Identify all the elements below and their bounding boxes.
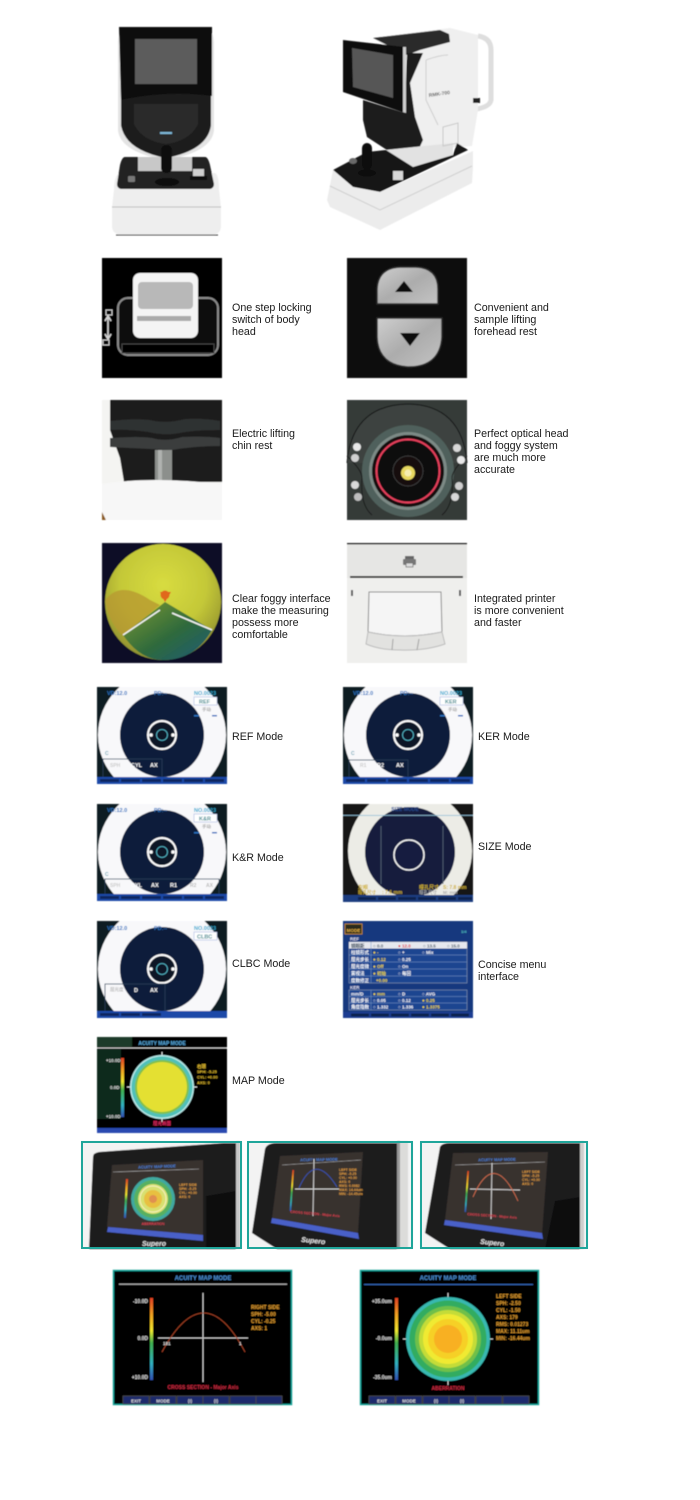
caption: forehead rest: sample lifting [474,314,536,326]
screen: menu interface: ● Off [373,964,384,969]
screen: aberration chart: AXS: 179 [496,1315,518,1321]
screen: cross section chart: MODE [156,1398,170,1404]
framed photo: major axis red curve on device: Supero [480,1239,505,1248]
framed photo: major axis red curve on device: ACUITY MAP MODE [478,1157,516,1162]
caption: menu interface: Concise menu [478,959,546,971]
framed photo: major axis red curve on device: CYL: +0.00 [522,1178,540,1182]
screen: menu interface: 雾视法 [351,970,365,977]
screen: CLBC mode: NO.0023 [194,926,216,932]
caption: chin rest: Electric lifting [232,428,295,440]
screen: K&R mode: SPH [110,883,121,889]
screen: REF mode: 手动 [202,706,211,713]
screen: aberration chart: (I) [434,1398,439,1404]
framed photo: major axis red curve on device: SPH: -5.25 [522,1174,539,1178]
screen: KER mode: VD:12.0 [353,691,373,697]
frame border: blue curve photo [248,1142,412,1248]
caption: MAP mode: MAP Mode [232,1075,285,1087]
screen: REF mode: CYL [131,763,143,769]
screen: MAP mode: 右眼 [197,1063,206,1070]
screen: REF mode: REF [199,700,211,706]
screen: menu interface: MODE [347,928,360,933]
screen: cross section chart: 181 [163,1341,171,1346]
screen: MAP mode: CYL: +0.00 [197,1074,218,1080]
screen: SIZE mode: : 7.6 mm [382,890,403,896]
framed photo: major axis blue curve on device: SPH: -5.25 [339,1172,356,1176]
caption: locking switch: One step locking [232,302,312,314]
screen: aberration chart: LEFT SIDE [496,1294,522,1300]
framed photo: aberration map on device: CYL: +0.00 [179,1191,197,1195]
screen: SIZE mode: 瞳孔尺寸 [419,884,439,891]
screen: menu interface: ○ Mix [422,950,434,955]
screen: KER mode: NO.0023 [440,691,462,697]
screen: cross section chart: +10.0D [132,1375,148,1381]
screen: menu interface: ● 初始 [373,970,386,977]
photo: forehead rest buttons [347,258,467,378]
screen: KER mode: 手动 [448,706,457,713]
screen: aberration chart: -0.0um [376,1336,393,1342]
screen: REF mode: C [105,751,109,757]
screen: KER mode: PD:-- [400,691,413,697]
screen: KER mode: C [351,751,355,757]
screen: MAP mode: AXS: 0 [197,1080,211,1085]
screen: cross section chart: (I) [214,1398,219,1404]
screen: menu interface: ○ 每回 [398,970,411,977]
screen: menu interface: ○ 1.336 [398,1004,414,1010]
frame border: aberration photo [82,1142,241,1248]
screen: CLBC mode [97,905,227,1033]
screen: menu interface: ○ 0.05 [373,998,386,1003]
caption: foggy interface: comfortable [232,629,288,641]
screen: menu interface: ● 0.12 [373,957,386,962]
screen: menu interface: ○ 0.12 [398,998,411,1003]
screen: menu interface: 屈光步长 [351,997,369,1004]
screen: SIZE mode: S: 7.8 mm [443,885,467,891]
caption: REF mode: REF Mode [232,731,283,743]
caption: locking switch: switch of body [232,314,300,326]
caption: printer: Integrated printer [474,593,556,605]
product photo: front view of the device [112,27,221,235]
framed photo: major axis blue curve on device: Supero [301,1237,326,1246]
caption: optical head: accurate [474,464,515,476]
screen: REF mode: SPH [110,763,121,769]
framed photo: major axis blue curve on device: CYL: +0.00 [339,1176,357,1180]
screen: menu interface: 1/4 [461,929,467,934]
screen: menu interface: ○ D [398,992,406,996]
caption: SIZE mode: SIZE Mode [478,841,532,853]
screen: menu interface: KER [350,985,360,990]
framed photo: major axis red curve on device: AXS: 0 [522,1182,533,1186]
screen: MAP mode: 0.0D [110,1085,120,1090]
caption: KER mode: KER Mode [478,731,530,743]
photo: locking switch [102,258,222,378]
screen: REF mode: NO.0023 [194,691,216,697]
screen: aberration chart: MIN: -16.44um [496,1336,530,1342]
screen: menu interface: 角度指数 [351,1004,369,1010]
screen: aberration chart [360,1270,538,1404]
framed photo: aberration map on device: SPH: -5.25 [179,1187,196,1191]
screen: SIZE mode: 瞳孔尺寸 [419,889,437,896]
framed photo: aberration map on device [81,1141,242,1249]
framed photo: aberration map on device: Supero [142,1241,167,1248]
screen: menu interface: REF [350,936,359,942]
screen: CLBC mode: 屈光度 [110,986,124,993]
photo: integrated printer [347,543,467,663]
caption: optical head: Perfect optical head [474,428,569,440]
caption: printer: and faster [474,617,522,629]
caption: optical head: are much more [474,452,546,464]
screen: MAP mode: +10.0D [106,1114,121,1119]
screen: MAP mode: SPH: -5.25 [197,1069,218,1074]
screen: CLBC mode: VD:12.0 [107,926,127,932]
caption: forehead rest: forehead rest [474,326,537,338]
screen: menu interface [343,921,473,1018]
screen: CLBC mode: D [134,988,138,994]
screen: aberration chart: RMS: 0.01273 [496,1322,528,1328]
screen: menu interface: 镜眼距 [351,942,365,950]
caption: printer: is more convenient [474,605,564,617]
screen: cross section chart: 1 [239,1341,242,1346]
screen: MAP mode: 屈光断面 [153,1120,171,1127]
screen: aberration chart: CYL: -1.50 [496,1308,521,1314]
photo: foggy interface [102,543,222,663]
screen: K&R mode: 手动 [202,823,211,830]
screen: K&R mode: PD:-- [154,808,167,814]
screen: REF mode [97,671,227,799]
photo: optical head [347,400,467,520]
screen: menu interface: ● 12.0 [398,944,411,948]
screen: aberration chart: MODE [402,1398,416,1404]
screen: CLBC mode: AX [150,988,158,994]
screen: cross section chart [114,1270,292,1404]
framed photo: aberration map on device: AXS: 0 [179,1195,190,1199]
frame border: red curve photo [421,1142,587,1248]
screen: menu interface: ○ On [398,964,408,969]
screen: K&R mode: K&R [199,816,211,822]
framed photo: major axis blue curve on device: MAX: 14.44um [339,1188,363,1192]
screen: MAP mode [97,1037,227,1133]
screen: SIZE mode: 左眼 [358,884,368,891]
screen: aberration chart: -35.0um [373,1375,393,1381]
screen: cross section chart: SPH: -5.00 [251,1312,276,1318]
screen: menu interface: ○ 0.0 [373,944,384,948]
caption: foggy interface: make the measuring [232,605,329,617]
screen: menu interface: ○ 1.332 [373,1004,389,1010]
framed photo: aberration map on device: ACUITY MAP MODE [138,1163,176,1170]
framed photo: major axis blue curve on device: CROSS SECTION - Major Axis [290,1210,340,1218]
screen: cross section chart: CROSS SECTION - Major Axis [168,1385,239,1391]
screen: SIZE mode [343,789,473,913]
screen: menu interface: ● mm [373,992,385,996]
framed photo: major axis red curve on device: LEFT SIDE [522,1170,541,1174]
screen: KER mode: R1 [360,763,367,769]
framed photo: major axis red curve on device [420,1141,588,1249]
screen: menu interface: ● 1.3375 [422,1004,440,1010]
screen: aberration chart: ACUITY MAP MODE [420,1276,476,1282]
screen: menu interface: 屈光步长 [351,956,369,963]
screen: cross section chart: AXS: 1 [251,1326,267,1332]
screen: K&R mode: NO.0023 [194,808,216,814]
screen: menu interface: +0.00 [376,978,388,983]
screen: aberration chart: (I) [460,1398,465,1404]
screen: SIZE mode: 瞳孔尺寸 [358,889,376,896]
caption: optical head: and foggy system [474,440,558,452]
framed photo: major axis blue curve on device: LEFT SIDE [339,1168,358,1172]
screen: KER mode: KER [445,700,457,706]
screen: aberration chart: SPH: -2.50 [496,1301,521,1307]
screen: aberration chart: +35.0um [372,1299,393,1305]
product photo: angled view of the device [327,28,491,230]
photo: chin rest [102,400,222,520]
screen: menu interface: ○ 13.5 [423,944,436,948]
screen: menu interface: 柱镜形式 [351,949,369,956]
caption: K&R mode: K&R Mode [232,852,284,864]
screen: CLBC mode: CLBC [197,934,212,940]
screen: cross section chart: ACUITY MAP MODE [175,1276,231,1282]
screen: aberration chart: MAX: 11.11um [496,1329,530,1335]
screen: menu interface: ● - [373,950,379,955]
caption: chin rest: chin rest [232,440,272,452]
screen: menu interface: ○ 0.25 [398,957,411,962]
screen: menu interface: ○ 15.0 [447,944,460,948]
screen: K&R mode [97,788,227,916]
framed photo: major axis blue curve on device: ACUITY MAP MODE [300,1157,338,1162]
screen: K&R mode: R1 [170,883,177,889]
framed photo: major axis red curve on device: CROSS SECTION - Major Axis [467,1212,517,1220]
caption: CLBC mode: CLBC Mode [232,958,290,970]
screen: KER mode: AX [396,763,404,769]
screen: cross section chart: (I) [188,1398,193,1404]
screen: MAP mode: ACUITY MAP MODE [138,1041,186,1047]
screen: cross section chart: 0.0D [137,1336,148,1342]
framed photo: aberration map on device: LEFT SIDE [179,1183,198,1187]
screen: REF mode: PD:-- [154,691,167,697]
screen: cross section chart: -10.0D [133,1299,148,1305]
screen: REF mode: AX [150,763,158,769]
screen: K&R mode: AX [151,883,159,889]
screen: aberration chart: EXIT [377,1398,387,1404]
caption: foggy interface: possess more [232,617,299,629]
screen: menu interface: ○ + [398,950,405,955]
screen: cross section chart: EXIT [131,1398,141,1404]
screen: cross section chart: CYL: -0.25 [251,1319,276,1325]
screen: K&R mode: C [105,872,109,878]
screen: menu interface: 屈光度微 [351,963,369,970]
framed photo: major axis blue curve on device [247,1141,413,1249]
framed photo: major axis blue curve on device: RMS: 0.0082 [339,1184,360,1188]
screen: aberration chart: ABERRATION [432,1386,465,1392]
screen: menu interface: mm/D [351,992,364,996]
screen: MAP mode: +10.0D [106,1058,121,1063]
screen: K&R mode: VD:12.0 [107,808,127,814]
screen: KER mode [343,671,473,799]
screen: K&R mode: CYL [131,883,143,889]
screen: cross section chart: RIGHT SIDE [251,1305,280,1311]
product photo: angled view of the device: RMK-700 [428,90,451,99]
screen: menu interface: 度数修正 [351,977,369,984]
framed photo: aberration map on device: ABERRATION [141,1222,165,1226]
caption: forehead rest: Convenient and [474,302,549,314]
screen: REF mode: VD:12.0 [107,691,127,697]
screen: K&R mode: AX [206,883,214,889]
caption: menu interface: interface [478,971,519,983]
caption: foggy interface: Clear foggy interface [232,593,331,605]
screen: SIZE mode: M: mm [443,890,458,895]
screen: menu interface: ● 0.25 [422,998,435,1003]
screen: SIZE mode: SIZE MODE [391,807,419,813]
screen: menu interface: ○ AVG [422,992,436,996]
screen: K&R mode: R2 [190,883,197,889]
caption: locking switch: head [232,326,256,338]
screen: CLBC mode: PD:-- [154,926,167,932]
screen: KER mode: R2 [377,763,384,769]
framed photo: major axis blue curve on device: MIN: -14.45um [339,1192,363,1196]
framed photo: major axis blue curve on device: AXS: 0 [339,1180,350,1184]
